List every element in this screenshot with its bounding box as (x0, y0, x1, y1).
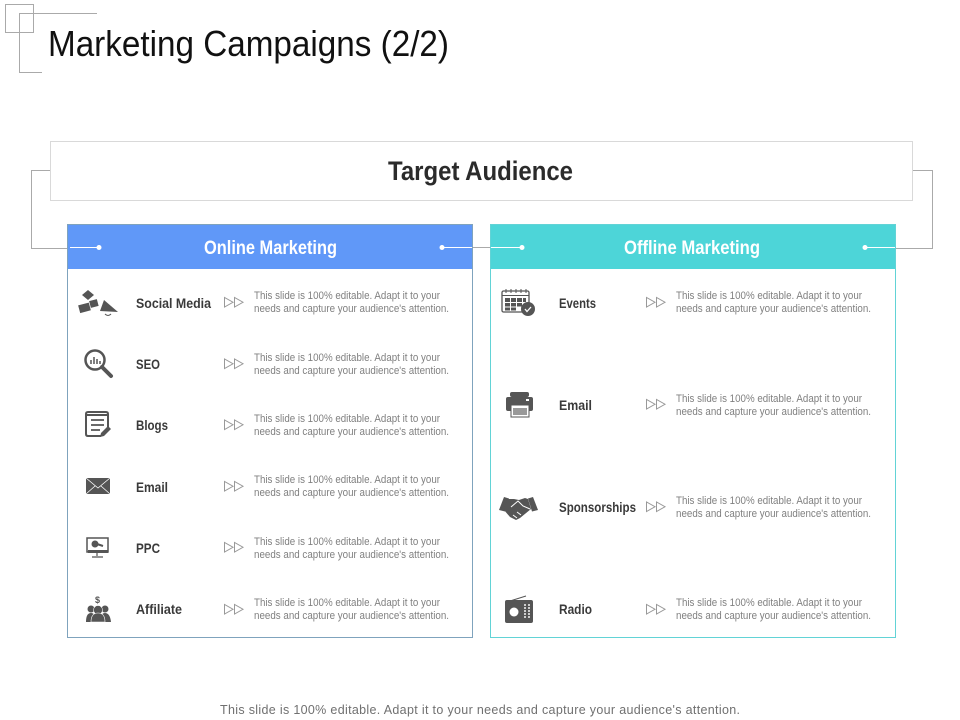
row: radio: needs and capture your audience's attention. (676, 610, 871, 622)
icon: notepad and pencil (86, 412, 111, 437)
title: Marketing Campaigns (2/2) (48, 23, 449, 64)
row: social media: This slide is 100% editable. Adapt it to your (254, 290, 440, 302)
row: social media (78, 290, 449, 316)
offline marketing header (491, 225, 895, 269)
row: blogs (86, 412, 449, 438)
row: seo: SEO (136, 356, 160, 372)
row: blogs: Blogs (136, 417, 168, 433)
row: events: This slide is 100% editable. Adapt it to your (676, 290, 862, 302)
row: email offline (506, 392, 871, 418)
row: affiliate: Affiliate (136, 601, 182, 617)
online marketing header: Online Marketing (204, 238, 337, 259)
icon: radio (505, 596, 533, 623)
row: seo: This slide is 100% editable. Adapt it to your (254, 352, 440, 364)
row: email: Email (136, 479, 168, 495)
row: sponsorships: needs and capture your audience's attention. (676, 508, 871, 520)
row: email: This slide is 100% editable. Adapt it to your (254, 474, 440, 486)
row: ppc: needs and capture your audience's attention. (254, 549, 449, 561)
row: email offline: Email (559, 397, 592, 413)
row: events: Events (559, 295, 596, 311)
row: radio: Radio (559, 601, 592, 617)
online marketing header (68, 225, 472, 269)
row: ppc: PPC (136, 540, 160, 556)
row: email: needs and capture your audience's attention. (254, 487, 449, 499)
connector lines (32, 170, 932, 248)
icon: computer monitor (87, 538, 108, 557)
icon: magnifying glass (86, 350, 111, 376)
icon: calendar with check (502, 289, 535, 316)
panel: offline marketing (490, 224, 896, 638)
row: blogs: This slide is 100% editable. Adapt it to your (254, 413, 440, 425)
row: ppc (87, 536, 449, 561)
row: events (502, 289, 871, 316)
row: social media: needs and capture your audience's attention. (254, 303, 449, 315)
row: sponsorships: This slide is 100% editable. Adapt it to your (676, 495, 862, 507)
offline marketing header: Offline Marketing (624, 238, 760, 259)
row: sponsorships (499, 495, 871, 520)
row: affiliate: This slide is 100% editable. Adapt it to your (254, 597, 440, 609)
icon: group of people with dollar: $ (95, 595, 100, 605)
row: affiliate (86, 595, 449, 622)
icon: social media megaphone (78, 290, 118, 316)
row: email offline: needs and capture your audience's attention. (676, 406, 871, 418)
row: blogs: needs and capture your audience's attention. (254, 426, 449, 438)
row: seo (86, 350, 449, 377)
row: seo: needs and capture your audience's attention. (254, 365, 449, 377)
icon: envelope (86, 478, 110, 494)
target audience box (50, 142, 912, 200)
icon: handshake (499, 497, 538, 520)
decorative corner frame (6, 4, 97, 72)
row: radio (505, 596, 871, 623)
row: email offline: This slide is 100% editable. Adapt it to your (676, 393, 862, 405)
row: ppc: This slide is 100% editable. Adapt it to your (254, 536, 440, 548)
row: affiliate: needs and capture your audience's attention. (254, 610, 449, 622)
icon: printer (506, 392, 533, 417)
row: radio: This slide is 100% editable. Adapt it to your (676, 597, 862, 609)
row: sponsorships: Sponsorships (559, 499, 636, 515)
footer text: This slide is 100% editable. Adapt it to your needs and capture your audience's attention. (220, 703, 740, 717)
icon: group of people with dollar (86, 595, 111, 622)
row: social media: Social Media (136, 295, 211, 311)
row: email (86, 474, 449, 499)
target audience box: Target Audience (388, 156, 573, 186)
panel: online marketing (68, 224, 472, 638)
row: events: needs and capture your audience's attention. (676, 303, 871, 315)
